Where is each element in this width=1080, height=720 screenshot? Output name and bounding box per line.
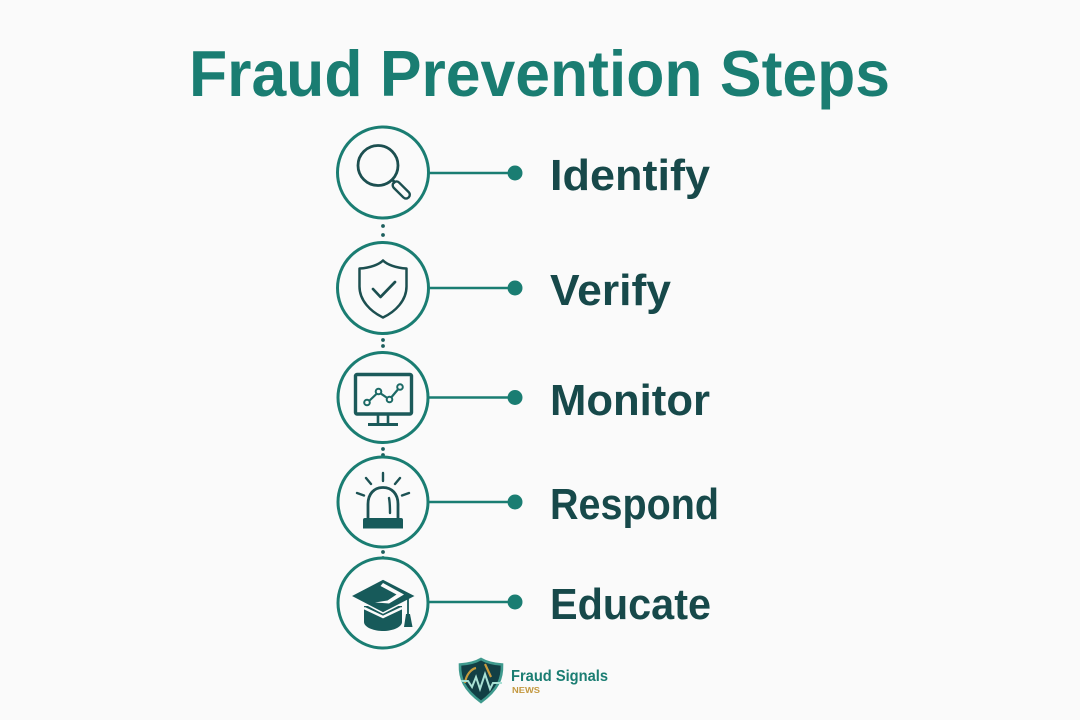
step 4: respond [338, 457, 719, 547]
logo: Fraud Signals News [460, 659, 608, 702]
node dot [508, 594, 522, 610]
step 2: verify [338, 242, 672, 334]
brand subtitle: NEWS [512, 685, 540, 695]
brand name: Fraud Signals [511, 668, 608, 685]
icon circle: alarm siren [338, 457, 428, 547]
title: Fraud Prevention Steps [189, 37, 890, 110]
label: Verify [550, 266, 672, 315]
connector line [429, 287, 515, 289]
node dot [508, 494, 522, 510]
label: Educate [550, 580, 711, 629]
connector dots between steps [381, 224, 385, 560]
step 3: monitor [338, 352, 710, 442]
label: Identify [550, 151, 711, 200]
node dot [508, 390, 522, 405]
label: Respond [550, 480, 719, 529]
connector line [429, 501, 515, 503]
label: Monitor [550, 376, 710, 425]
icon circle: graduation cap [338, 558, 428, 648]
connector line [429, 172, 515, 174]
icon circle: monitor with line chart [338, 352, 428, 442]
step 5: educate [338, 558, 711, 648]
node dot [508, 166, 522, 180]
connector line [429, 396, 515, 399]
step 1: identify [338, 127, 711, 218]
icon circle: shield with check [338, 242, 428, 334]
node dot [508, 280, 522, 296]
connector line [429, 601, 515, 603]
icon circle: magnifying glass [338, 127, 428, 218]
icon: shield logo [460, 659, 502, 702]
